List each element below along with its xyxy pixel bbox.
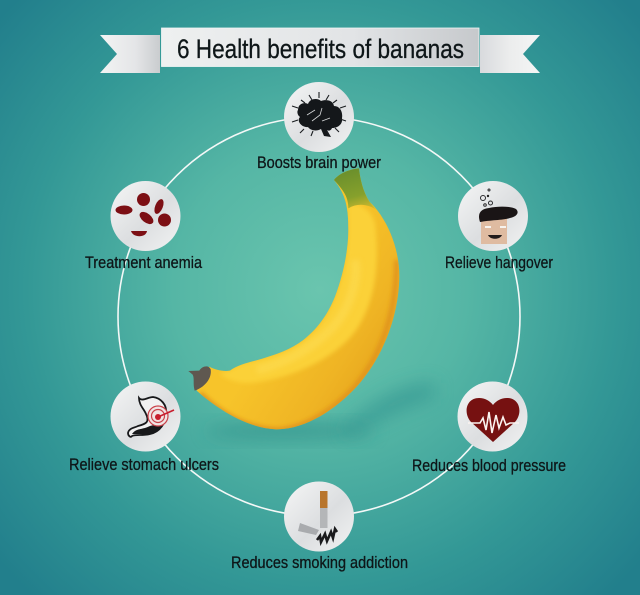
label: Reduces blood pressure — [412, 456, 566, 475]
icon: heart with pulse — [467, 398, 519, 442]
ribbon right tail — [480, 35, 540, 73]
ribbon left tail — [100, 35, 160, 73]
icon: brain — [292, 92, 346, 137]
disc — [110, 382, 180, 452]
benefit: relieve stomach ulcers — [69, 382, 219, 474]
banner: title ribbon — [100, 28, 540, 73]
banana shading — [200, 203, 397, 430]
benefit: treatment anemia — [85, 181, 202, 272]
hair — [479, 207, 518, 222]
icon: broken cigarette — [298, 491, 337, 542]
banana tip — [188, 366, 211, 391]
disc — [110, 181, 180, 251]
disc — [284, 82, 354, 152]
face — [481, 214, 507, 244]
disc — [458, 382, 528, 452]
benefit: reduces blood pressure — [412, 382, 566, 475]
ring connecting the benefits — [118, 117, 520, 516]
banana body — [197, 168, 399, 429]
ribbon centre panel — [162, 28, 479, 66]
benefit: reduces smoking addiction — [231, 482, 408, 572]
banana illustration — [188, 168, 399, 430]
banana stem — [334, 168, 377, 210]
label: Reduces smoking addiction — [231, 553, 408, 572]
disc — [284, 482, 354, 552]
bubbles — [480, 189, 492, 206]
eyes and mouth — [485, 226, 506, 228]
label: Relieve stomach ulcers — [69, 455, 219, 474]
banana shadow — [205, 382, 435, 439]
icon: stomach with target — [128, 397, 174, 437]
label: Treatment anemia — [85, 253, 202, 272]
label: Relieve hangover — [445, 253, 553, 272]
benefit: relieve hangover — [445, 181, 553, 272]
title: 6 Health benefits of bananas — [177, 34, 464, 64]
label: Boosts brain power — [257, 153, 381, 172]
icon: hangover face — [479, 189, 518, 244]
benefit: boosts brain power — [257, 82, 381, 172]
icon: red blood cells — [116, 193, 171, 236]
disc — [458, 181, 528, 251]
